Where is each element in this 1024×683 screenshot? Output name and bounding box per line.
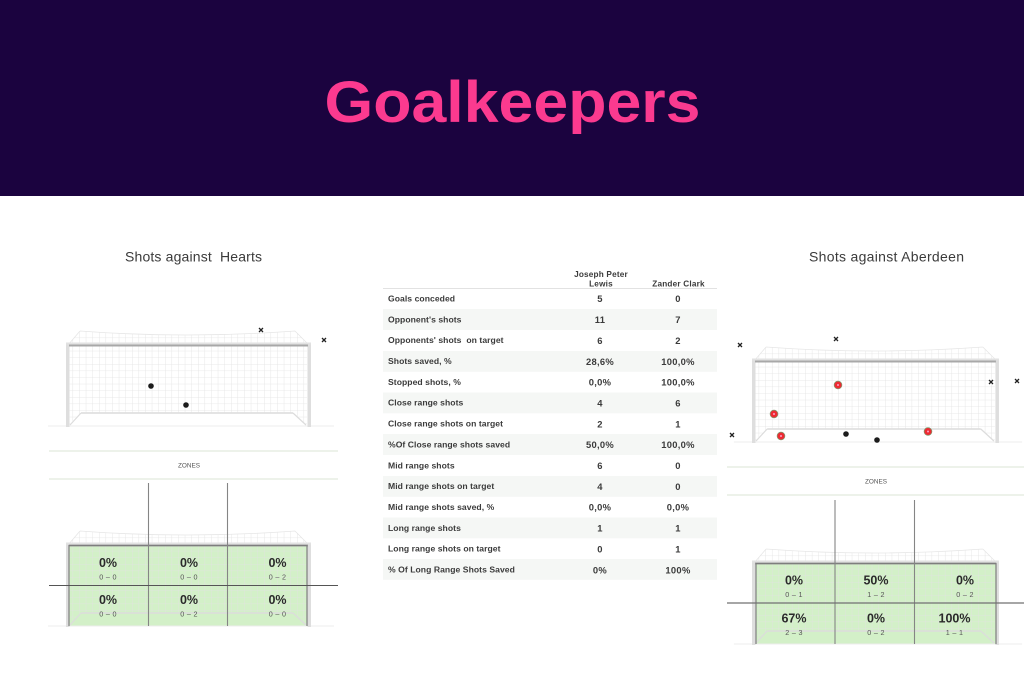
table rows: 0,0%	[589, 502, 612, 513]
zones goal grid: Aberdeen	[727, 500, 1024, 645]
zone values: 0%	[268, 556, 287, 570]
zone values	[99, 556, 287, 618]
zones header	[49, 451, 338, 479]
table rows	[388, 293, 695, 575]
table rows: Opponents' shots on target	[388, 335, 504, 345]
zone values: 0%	[180, 593, 198, 607]
zone values: 2 – 3	[785, 628, 803, 637]
table rows: %Of Close range shots saved	[388, 439, 510, 449]
goals conceded markers	[770, 381, 932, 440]
table rows: Close range shots on target	[388, 419, 503, 429]
missed shot markers	[259, 328, 326, 342]
table header	[383, 270, 717, 288]
table rows: Long range shots on target	[388, 544, 501, 554]
panel: shots against Aberdeen	[727, 248, 1024, 645]
table rows: 1	[597, 523, 603, 534]
zone values: 0 – 2	[180, 610, 198, 618]
table rows: Stopped shots, %	[388, 377, 461, 387]
zone values: 0 – 0	[269, 610, 286, 618]
table rows: 5	[597, 293, 603, 304]
zone values: 100%	[939, 612, 970, 626]
zone values: 0%	[268, 593, 287, 607]
table row shading	[383, 309, 717, 580]
panel: comparison table	[383, 270, 717, 580]
table rows: Opponent's shots	[388, 314, 462, 324]
zones header: ZONES	[865, 478, 887, 486]
table rows: 100,0%	[661, 377, 695, 388]
table rows: 0	[675, 293, 681, 304]
table header: Lewis	[589, 280, 613, 288]
table rows: 100,0%	[661, 356, 695, 367]
table rows: 11	[595, 314, 605, 325]
header banner	[0, 0, 1024, 196]
table rows: 0	[675, 481, 681, 492]
table rows: Mid range shots saved, %	[388, 502, 495, 512]
panel: shots against Hearts	[48, 248, 338, 627]
zone values: 0 – 0	[99, 610, 117, 618]
table rows: Mid range shots	[388, 460, 455, 470]
zone values: 50%	[863, 574, 889, 588]
table rows: 4	[597, 398, 603, 408]
zone values: 0%	[956, 574, 974, 588]
table rows: Close range shots	[388, 398, 464, 408]
table rows: 1	[675, 543, 681, 554]
zone values: 0%	[867, 612, 885, 626]
table rows: Mid range shots on target	[388, 481, 494, 491]
zones header: ZONES	[178, 462, 200, 470]
zone values: 1 – 1	[946, 628, 963, 637]
zone values: 0 – 1	[785, 590, 803, 599]
table rows: Long range shots	[388, 523, 461, 533]
table rows: 50,0%	[586, 439, 614, 450]
table rows: 6	[675, 398, 681, 408]
zone values: 1 – 2	[867, 590, 885, 599]
zone values: 0 – 2	[956, 590, 974, 599]
table rows: Goals conceded	[388, 294, 455, 304]
on-target shot dots	[148, 383, 189, 408]
table rows: 4	[597, 481, 603, 492]
table rows: Shots saved, %	[388, 356, 452, 366]
zone values: 67%	[781, 612, 807, 626]
table rows: 0,0%	[589, 377, 612, 388]
zone values: 0 – 2	[867, 628, 885, 637]
zone values: 0%	[99, 556, 117, 570]
table rows: 100%	[665, 564, 691, 575]
zone values: 0 – 0	[99, 572, 117, 582]
table rows: 0	[675, 460, 681, 471]
table header: Zander Clark	[652, 280, 705, 288]
goal map: Hearts shots	[48, 328, 334, 427]
table rows: 7	[675, 314, 681, 325]
table rows: 6	[597, 335, 603, 346]
heading: shots against Hearts: Shots against Hearts	[125, 248, 262, 264]
table rows: 28,6%	[586, 356, 614, 367]
table rows: 6	[597, 460, 603, 471]
table rows: 1	[675, 523, 681, 534]
on-target shot dots	[843, 431, 880, 443]
table rows: 100,0%	[661, 439, 695, 450]
zone values	[781, 574, 974, 637]
title: Goalkeepers	[324, 70, 700, 135]
zone values: 0 – 2	[269, 572, 286, 582]
zone values: 0%	[99, 593, 117, 607]
goal map: Aberdeen shots	[730, 337, 1022, 443]
zones header	[727, 467, 1024, 495]
table rows: 2	[597, 418, 603, 429]
zone values: 0%	[180, 556, 198, 570]
zone values: 0 – 0	[180, 572, 198, 582]
zone values: 0%	[785, 574, 803, 588]
table rows: % Of Long Range Shots Saved	[388, 564, 515, 574]
goal marker centres	[773, 384, 929, 437]
table rows: 0	[597, 543, 603, 554]
table rows: 0%	[593, 564, 607, 575]
table rows: 1	[675, 418, 681, 429]
table rows: 2	[675, 335, 681, 346]
zones goal grid: Hearts	[48, 483, 338, 627]
table rows: 0,0%	[667, 502, 690, 513]
table header: Joseph Peter	[574, 270, 629, 279]
heading: shots against Aberdeen: Shots against Aberdeen	[809, 248, 964, 264]
missed shot markers	[730, 337, 1019, 437]
